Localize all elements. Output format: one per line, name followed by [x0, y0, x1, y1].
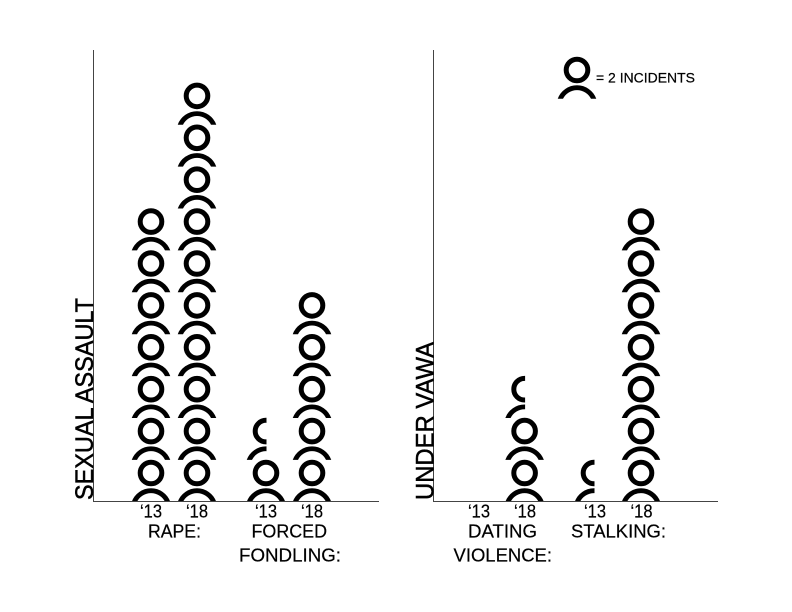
- year labels: right chart: [468, 502, 652, 522]
- column: rape 2013: [132, 211, 170, 502]
- category label: dating violence: [454, 520, 552, 566]
- right chart axes: [434, 50, 718, 502]
- vertical heading: under VAWA: UNDER VAWA: [412, 342, 440, 500]
- column: forced fondling 2018: [293, 295, 331, 502]
- legend: [558, 59, 695, 99]
- column: forced fondling 2013: [247, 420, 285, 502]
- year labels: right chart: ‘18: [630, 502, 652, 522]
- column: stalking 2013: [575, 462, 613, 502]
- year labels: left chart: ‘18: [186, 502, 208, 522]
- left chart axes: [94, 50, 379, 502]
- icon: person: [558, 59, 596, 99]
- category label: dating violence: VIOLENCE:: [454, 544, 552, 566]
- year labels: right chart: ‘18: [514, 502, 536, 522]
- category label: rape: RAPE:: [148, 520, 201, 542]
- category label: stalking: STALKING:: [571, 520, 666, 542]
- year labels: left chart: ‘18: [301, 502, 323, 522]
- category label: forced fondling: FORCED: [252, 520, 327, 542]
- year labels: right chart: ‘13: [468, 502, 490, 522]
- year labels: right chart: ‘13: [584, 502, 606, 522]
- column: rape 2018: [178, 85, 216, 502]
- year labels: left chart: ‘13: [255, 502, 277, 522]
- category label: forced fondling: [239, 520, 341, 566]
- year labels: left chart: ‘13: [140, 502, 162, 522]
- column: dating violence 2018: [505, 378, 544, 502]
- vertical heading: sexual assault: SEXUAL ASSAULT: [71, 298, 99, 500]
- column: stalking 2018: [622, 211, 660, 502]
- category label: dating violence: DATING: [468, 520, 537, 542]
- category label: forced fondling: FONDLING:: [239, 544, 341, 566]
- legend text: = 2 INCIDENTS: [596, 70, 695, 86]
- year labels: left chart: [140, 502, 323, 522]
